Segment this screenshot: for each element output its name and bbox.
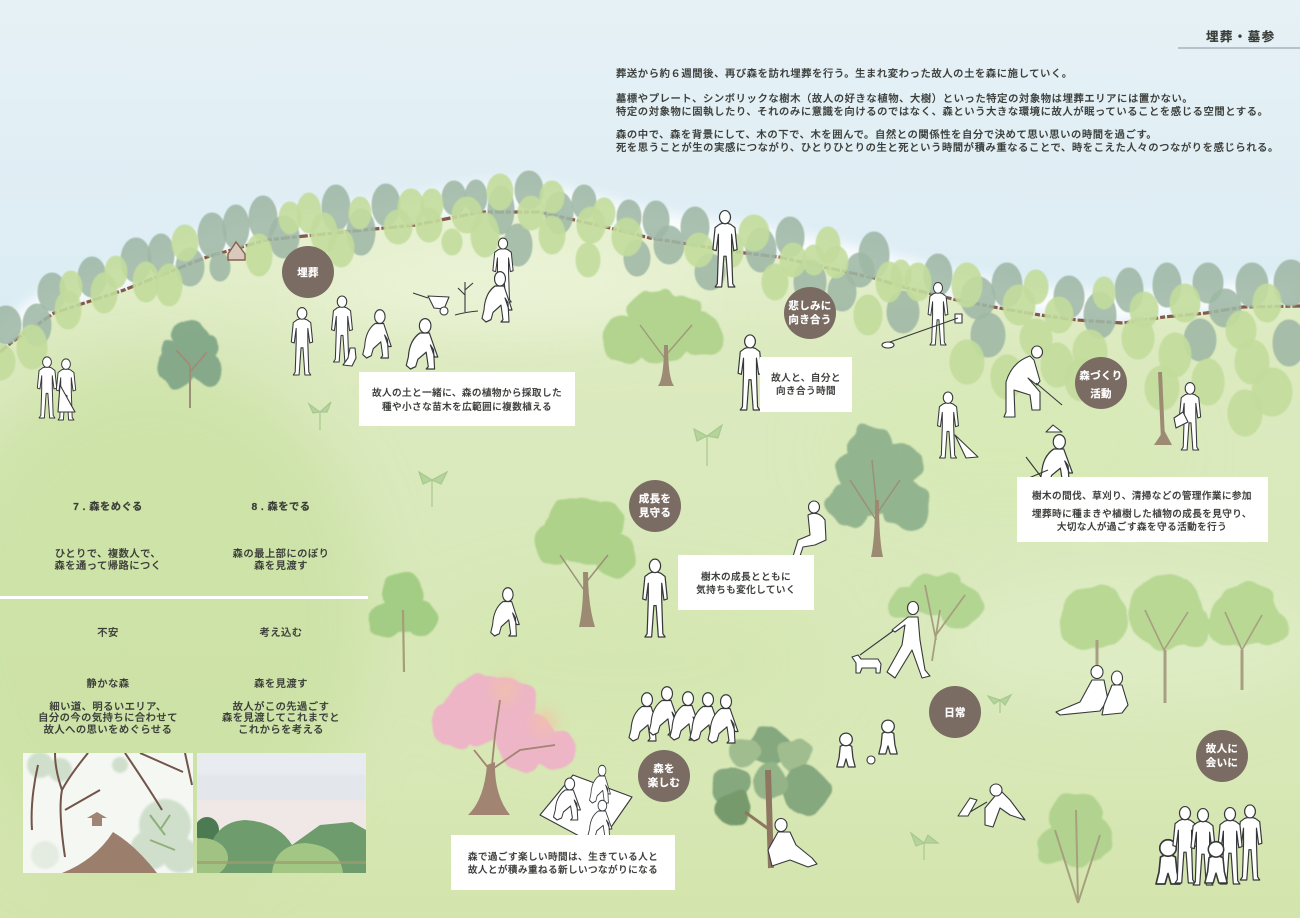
callout: burial: 故人の土と一緒に、森の植物から採取した: [372, 387, 562, 399]
text: overlooking forest: これからを考える: [238, 724, 324, 736]
text: quiet forest: [38, 677, 178, 736]
people: burial group: [291, 238, 513, 375]
text: step 7 description: ひとりで、複数人で、: [55, 547, 161, 560]
text: overlooking forest: 森を見渡す: [254, 677, 308, 690]
label: watching growth circle: [629, 480, 681, 532]
panel: step 7 and 8: [0, 500, 368, 736]
tree: slender green bottom right: [1036, 791, 1115, 903]
callout: growth: 樹木の成長とともに: [701, 571, 791, 583]
label: watching growth circle: 成長を: [639, 492, 671, 505]
intro text block: 森の中で、森を背景にして、木の下で、木を囲んで。自然との関係性を自分で決めて思い思いの時間を過ごす。: [616, 128, 1157, 141]
forest path along ridge: [0, 212, 1300, 352]
callout: forest activity: [1017, 477, 1268, 542]
text: quiet forest: 故人への思いをめぐらせる: [44, 723, 172, 736]
treeline: grey green trees: [0, 173, 1300, 364]
callout: growth: [678, 555, 814, 610]
people: couple standing: [37, 357, 76, 420]
illustration: quiet forest scene: [23, 752, 198, 873]
people: seated group of friends: [629, 687, 738, 743]
people: reader under tree: [768, 818, 817, 867]
label: burial circle: [282, 246, 334, 298]
heading: step 7: 7 . 森をめぐる: [73, 500, 143, 513]
label: enjoying circle: 楽しむ: [648, 776, 680, 789]
text: step 8 description: 森の最上部にのぼり: [233, 547, 329, 560]
people: man on hill: [713, 211, 737, 287]
tree: green, centre: [534, 495, 637, 627]
illustration: overlooking scene: [197, 753, 366, 873]
people: forest workers: [882, 282, 1201, 485]
tree: dark green, upper left: [158, 321, 223, 408]
background: hill: [0, 212, 1300, 918]
callout: enjoying the forest: 森で過ごす楽しい時間は、生きている人と: [468, 851, 658, 863]
text: step 7 description: [55, 547, 161, 572]
heading: step 8: 8 . 森をでる: [251, 500, 311, 513]
label: watching growth circle: 見守る: [639, 506, 671, 519]
callout: forest activity: 大切な人が過ごす森を守る活動を行う: [1057, 521, 1227, 533]
text: quiet forest: 自分の今の気持ちに合わせて: [38, 711, 178, 724]
people: couple sitting: [1056, 666, 1128, 715]
text: overlooking forest: [222, 677, 340, 736]
people: child with net: [958, 784, 1025, 827]
label: enjoying circle: [638, 750, 690, 802]
callout: facing oneself: 向き合う時間: [776, 385, 836, 397]
text: quiet forest: 細い道、明るいエリア、: [49, 700, 167, 713]
label: facing grief circle: 向き合う: [788, 313, 832, 326]
label: meeting the deceased circle: 故人に: [1206, 742, 1238, 755]
intro text block: [616, 67, 1279, 154]
text: overlooking forest: 森を見渡してこれまでと: [222, 711, 340, 724]
callout: forest activity: 埋葬時に種まきや植樹した植物の成長を見守り、: [1032, 508, 1252, 520]
tree: light green, centre top: [603, 290, 723, 386]
people: family visiting: [1156, 805, 1262, 885]
callout: facing oneself: 故人と、自分と: [771, 372, 841, 384]
callout: forest activity: 樹木の間伐、草刈り、清掃などの管理作業に参加: [1032, 490, 1252, 502]
label: daily life circle: [929, 686, 981, 738]
people: sitting and standing watchers: [491, 501, 826, 637]
title: [1178, 29, 1300, 49]
callout: enjoying the forest: [451, 835, 675, 890]
text: overlooking forest: 故人がこの先過ごす: [233, 700, 329, 713]
label: forest building circle: 森づくり: [1079, 369, 1123, 382]
icon: small hut on ridge: [228, 242, 245, 260]
label: facing grief circle: 悲しみに: [788, 299, 832, 312]
text: step 8 description: [233, 547, 329, 572]
tree: green, lower left: [368, 574, 438, 672]
text: feeling anxiety: 不安: [97, 626, 119, 639]
people: walking dog: [852, 602, 930, 678]
tree: pine style green: [710, 723, 829, 868]
title: 埋葬・墓参: [1206, 29, 1276, 44]
tree: pink cherry blossom: [433, 676, 575, 815]
icons: saplings: [309, 402, 1011, 860]
treeline: light green trees: [0, 176, 1290, 434]
people: person walking away: [738, 335, 762, 410]
tree: sapling trunk watered: [1154, 372, 1172, 445]
intro text block: 特定の対象物に固執したり、それのみに意識を向けるのではなく、森という大きな環境に故人が眠っていることを感じる空間とする。: [616, 105, 1269, 118]
label: daily life circle: 日常: [944, 706, 966, 719]
callout: burial: 種や小さな苗木を広範囲に複数植える: [382, 401, 552, 413]
people: children with ball: [837, 720, 897, 767]
callout: enjoying the forest: 故人とが積み重ねる新しいつながりになる: [468, 864, 658, 876]
label: forest building circle: 活動: [1090, 387, 1112, 400]
callout: growth: 気持ちも変化していく: [696, 584, 796, 596]
label: burial circle: 埋葬: [297, 266, 319, 279]
callout: facing oneself: [760, 357, 852, 412]
trees: trio at right: [1060, 575, 1289, 703]
text: step 8 description: 森を見渡す: [254, 559, 308, 572]
people: picnic blanket: [540, 765, 632, 846]
label: facing grief circle: [784, 287, 836, 339]
intro text block: 葬送から約６週間後、再び森を訪れ埋葬を行う。生まれ変わった故人の土を森に施していく。: [616, 67, 1073, 80]
callout: burial: [359, 372, 575, 426]
label: meeting the deceased circle: 会いに: [1206, 756, 1238, 769]
intro text block: 墓標やプレート、シンボリックな樹木（故人の好きな植物、大樹）といった特定の対象物は埋葬エリアには置かない。: [616, 92, 1193, 105]
tree: deep green, centre right: [827, 424, 929, 557]
label: enjoying circle: 森を: [653, 762, 675, 775]
label: forest building circle: [1075, 357, 1127, 409]
text: step 7 description: 森を通って帰路につく: [55, 559, 161, 572]
background: watercolor washes: [0, 250, 1300, 880]
text: quiet forest: 静かな森: [86, 677, 130, 690]
tree: light green behind walker: [890, 574, 982, 661]
text: feeling pensive: 考え込む: [260, 626, 302, 639]
background: white glow along ridge: [0, 197, 1300, 340]
intro text block: 死を思うことが生の実感につながり、ひとりひとりの生と死という時間が積み重なることで、時をこえた人々のつながりを感じられる。: [616, 141, 1279, 154]
label: meeting the deceased circle: [1196, 730, 1248, 782]
